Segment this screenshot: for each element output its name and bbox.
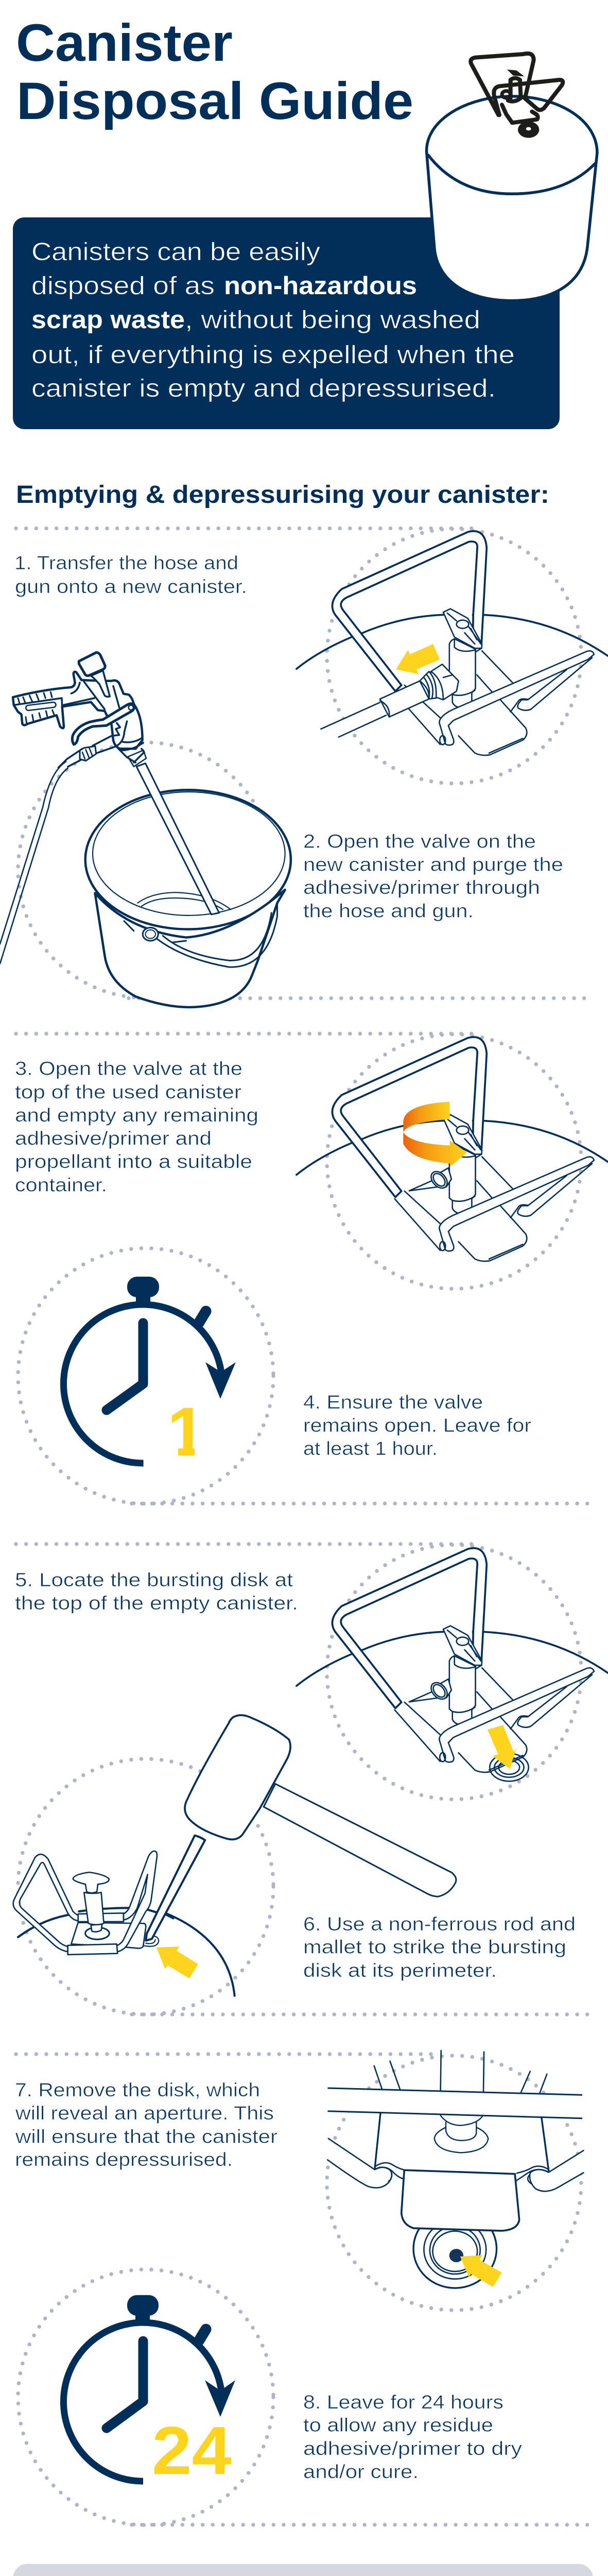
step 5 text: the top of the empty canister. xyxy=(15,1592,298,1614)
step 4 text: 4. Ensure the valve xyxy=(303,1392,483,1413)
step 4 text xyxy=(303,1392,531,1459)
step 7 text: remains depressurised. xyxy=(15,2149,233,2170)
illustration: canister top with rod and yellow arrow xyxy=(13,1836,235,1996)
illustration: spray gun, hose and bucket xyxy=(0,653,291,1007)
step 8 text: and/or cure. xyxy=(303,2461,419,2482)
step 6 text: mallet to strike the bursting xyxy=(303,1936,566,1958)
step 4 text: remains open. Leave for xyxy=(303,1415,531,1436)
step 7 text: 7. Remove the disk, which xyxy=(15,2079,260,2100)
step 6 text: 6. Use a non-ferrous rod and xyxy=(303,1913,576,1935)
step 1 text xyxy=(14,552,247,597)
panel: introduction: canister is empty and depressurised. xyxy=(31,375,496,402)
hours number: 24 xyxy=(152,2413,232,2488)
title: Canister xyxy=(16,13,233,72)
step 4 text: at least 1 hour. xyxy=(303,1438,438,1459)
panel: introduction: , without being washed xyxy=(185,306,480,334)
step 5 text xyxy=(15,1569,298,1614)
illustration: valve with hose and yellow arrow xyxy=(297,531,608,755)
step 3 text: adhesive/primer and xyxy=(15,1128,212,1149)
step 2 text xyxy=(303,831,563,922)
step 2 text: adhesive/primer through xyxy=(303,877,540,898)
panel: introduction xyxy=(13,217,560,429)
step 3 text: container. xyxy=(15,1175,107,1195)
step 8 text: adhesive/primer to dry xyxy=(303,2438,523,2459)
hour number: 1 xyxy=(167,1394,205,1470)
title: Disposal Guide xyxy=(16,72,413,130)
panel: disposal xyxy=(13,2564,593,2576)
step 3 text: and empty any remaining xyxy=(15,1105,258,1126)
step 2 text: 2. Open the valve on the xyxy=(303,831,536,852)
panel: introduction: Canisters can be easily xyxy=(31,238,321,266)
step 3 text: top of the used canister xyxy=(15,1081,241,1103)
step 6 text xyxy=(303,1913,576,1981)
panel: introduction: scrap waste xyxy=(31,306,185,334)
panel: introduction: non-hazardous xyxy=(224,272,417,300)
illustration: mallet xyxy=(185,1715,456,1896)
step 1 text: gun onto a new canister. xyxy=(15,576,247,597)
step 7 text: will ensure that the canister xyxy=(15,2126,277,2147)
stopwatch: 24 hours xyxy=(63,2295,235,2488)
step 3 text: 3. Open the valve at the xyxy=(15,1058,242,1079)
stopwatch: 1 hour xyxy=(63,1277,236,1470)
divider and dotted circles section two xyxy=(16,1033,591,1504)
step 6 text: disk at its perimeter. xyxy=(303,1960,497,1981)
icon: canister xyxy=(427,54,597,301)
step 8 text: to allow any residue xyxy=(303,2414,493,2436)
step 7 text xyxy=(15,2079,277,2170)
panel: introduction: disposed of as xyxy=(31,272,215,300)
illustration: valve with bursting disk xyxy=(297,1548,608,1781)
step 7 text: will reveal an aperture. This xyxy=(15,2103,274,2124)
title xyxy=(16,13,413,130)
step 5 text: 5. Locate the bursting disk at xyxy=(15,1569,293,1590)
illustration: disk removed revealing aperture xyxy=(327,2050,584,2288)
divider and dotted circles section three xyxy=(16,1544,591,2014)
panel: introduction: out, if everything is expelled when the xyxy=(31,341,515,369)
step 1 text: 1. Transfer the hose and xyxy=(14,552,238,573)
step 2 text: the hose and gun. xyxy=(303,901,474,922)
step 3 text xyxy=(15,1058,258,1195)
step 8 text xyxy=(303,2392,523,2482)
divider and dotted circles section four xyxy=(16,2054,591,2525)
step 3 text: propellant into a suitable xyxy=(15,1151,252,1172)
illustration: valve with rotation arrow xyxy=(297,1037,608,1261)
step 8 text: 8. Leave for 24 hours xyxy=(303,2392,503,2413)
hose xyxy=(0,761,68,964)
step 2 text: new canister and purge the xyxy=(303,854,563,875)
divider and dotted circles section one xyxy=(16,529,591,998)
heading: emptying and depressurising: Emptying & depressurising your canister: xyxy=(16,481,549,509)
